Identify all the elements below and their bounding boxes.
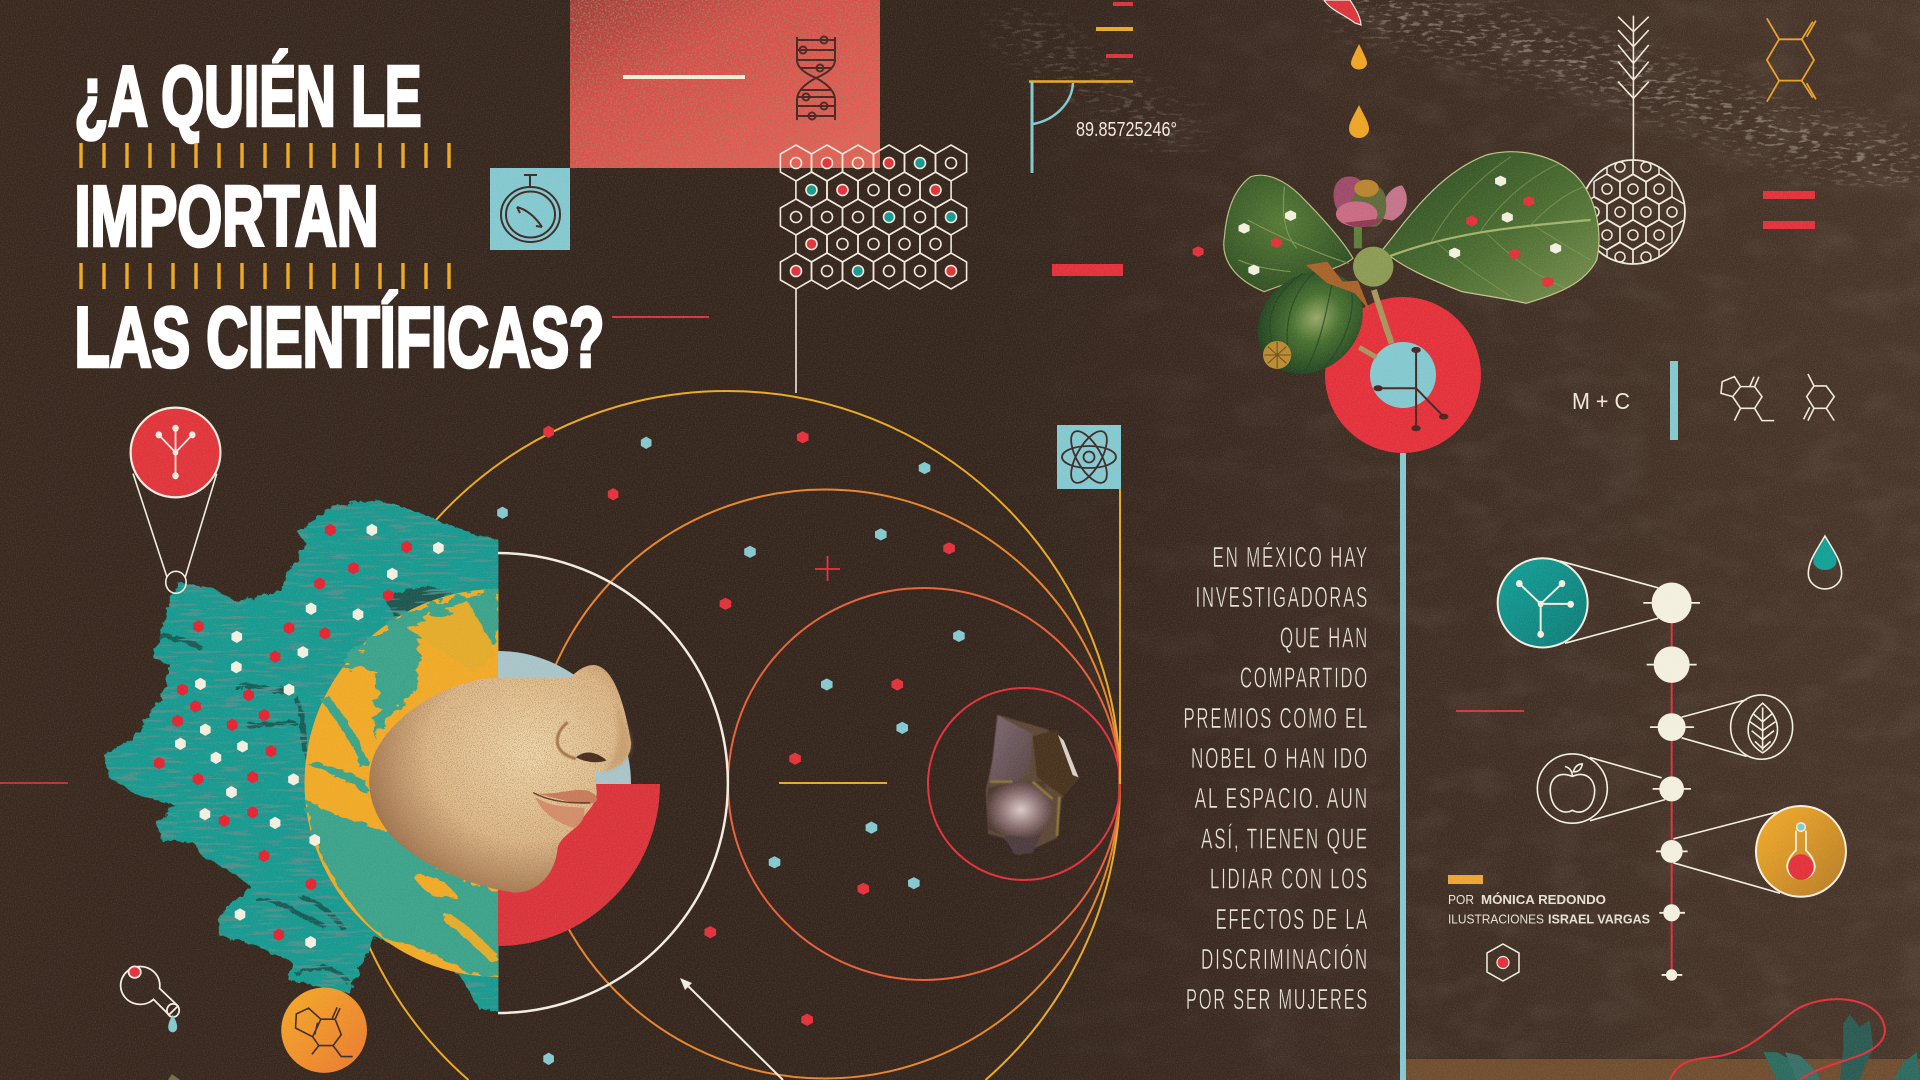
timeline with nodes <box>1498 558 1846 981</box>
ground band <box>1406 1059 1920 1080</box>
plants and red thread <box>1670 999 1920 1080</box>
white molecules <box>1721 374 1834 421</box>
icon: stopwatch on teal square <box>490 168 570 250</box>
hair, teal profile with dots <box>104 499 498 1012</box>
red bar <box>1052 264 1123 276</box>
icon: atom on teal square <box>1057 425 1121 784</box>
icon: DNA <box>797 36 835 120</box>
light blue disc <box>498 651 631 784</box>
orange molecule <box>1767 18 1816 102</box>
paragraph <box>1184 541 1369 1016</box>
tick rows <box>81 143 449 289</box>
plus mark <box>815 556 840 581</box>
panel: red textured square <box>570 0 880 168</box>
angle diagram <box>1029 81 1133 173</box>
arrow <box>680 978 783 1080</box>
hexagon grid <box>780 145 967 393</box>
big red circle with teal core <box>1325 297 1481 1080</box>
orange drops <box>1349 44 1369 138</box>
orange dash <box>779 782 887 784</box>
paragraph: COMPARTIDO <box>1240 663 1369 695</box>
credits <box>1448 875 1650 926</box>
icon: teal drop <box>1808 536 1842 589</box>
icon: apple circle <box>1537 754 1607 823</box>
angle value: 89.85725246° <box>1076 119 1177 141</box>
icon: flask circle <box>1756 806 1846 897</box>
title: ¿A QUIÉN LE <box>74 50 422 144</box>
M + C: M + C <box>1572 388 1630 414</box>
concentric orbit circles <box>334 391 1120 1080</box>
red quarter wedge <box>498 784 660 946</box>
title: IMPORTAN <box>74 170 378 264</box>
face <box>369 665 631 893</box>
paragraph: LIDIAR CON LOS <box>1210 864 1369 896</box>
paragraph: POR SER MUJERES <box>1186 984 1369 1016</box>
icon: teal branching circle <box>1498 558 1588 647</box>
accent line by title <box>612 316 709 318</box>
credits: ILUSTRACIONES <box>1448 912 1544 926</box>
icon: hexagon with red dot <box>1487 944 1519 981</box>
paragraph: AL ESPACIO. AUN <box>1195 783 1369 815</box>
tip of plant bottom left <box>168 1074 180 1080</box>
paragraph: EFECTOS DE LA <box>1216 904 1369 936</box>
marbled disc <box>304 588 498 977</box>
icon: leaf circle <box>1731 695 1793 759</box>
arrow tree and hex sphere <box>1581 16 1685 272</box>
right leaf <box>1382 152 1599 303</box>
fruit <box>1246 268 1374 378</box>
credits: ISRAEL VARGAS <box>1548 912 1650 926</box>
paper mottling <box>1280 2 1920 1006</box>
paragraph: DISCRIMINACIÓN <box>1201 943 1369 976</box>
left leaf <box>1224 175 1353 292</box>
red bars right <box>1763 191 1815 229</box>
red line <box>1456 710 1524 712</box>
icon: chili tip <box>1324 0 1361 25</box>
credits: MÓNICA REDONDO <box>1481 892 1606 907</box>
chalk texture <box>986 0 1920 187</box>
credits: POR <box>1448 892 1474 907</box>
title: LAS CIENTÍFICAS? <box>74 290 604 386</box>
white half circle <box>498 553 728 1013</box>
teal bar <box>1670 361 1678 440</box>
left red line <box>0 782 68 784</box>
title <box>74 50 604 386</box>
paragraph: EN MÉXICO HAY <box>1212 541 1369 574</box>
paragraph: QUE HAN <box>1280 622 1369 654</box>
pendant icon: red branching circle <box>131 408 220 593</box>
scatter dots <box>497 426 965 1065</box>
icon: orange molecule circle <box>281 988 367 1073</box>
paragraph: INVESTIGADORAS <box>1196 582 1369 614</box>
icon: key with drop <box>121 966 179 1032</box>
crystal <box>986 714 1079 855</box>
flower <box>1334 176 1407 227</box>
top dashes <box>1096 2 1133 58</box>
paragraph: NOBEL O HAN IDO <box>1191 743 1369 775</box>
paragraph: ASÍ, TIENEN QUE <box>1201 822 1369 855</box>
paragraph: PREMIOS COMO EL <box>1184 703 1369 735</box>
plant illustration <box>1193 152 1599 430</box>
